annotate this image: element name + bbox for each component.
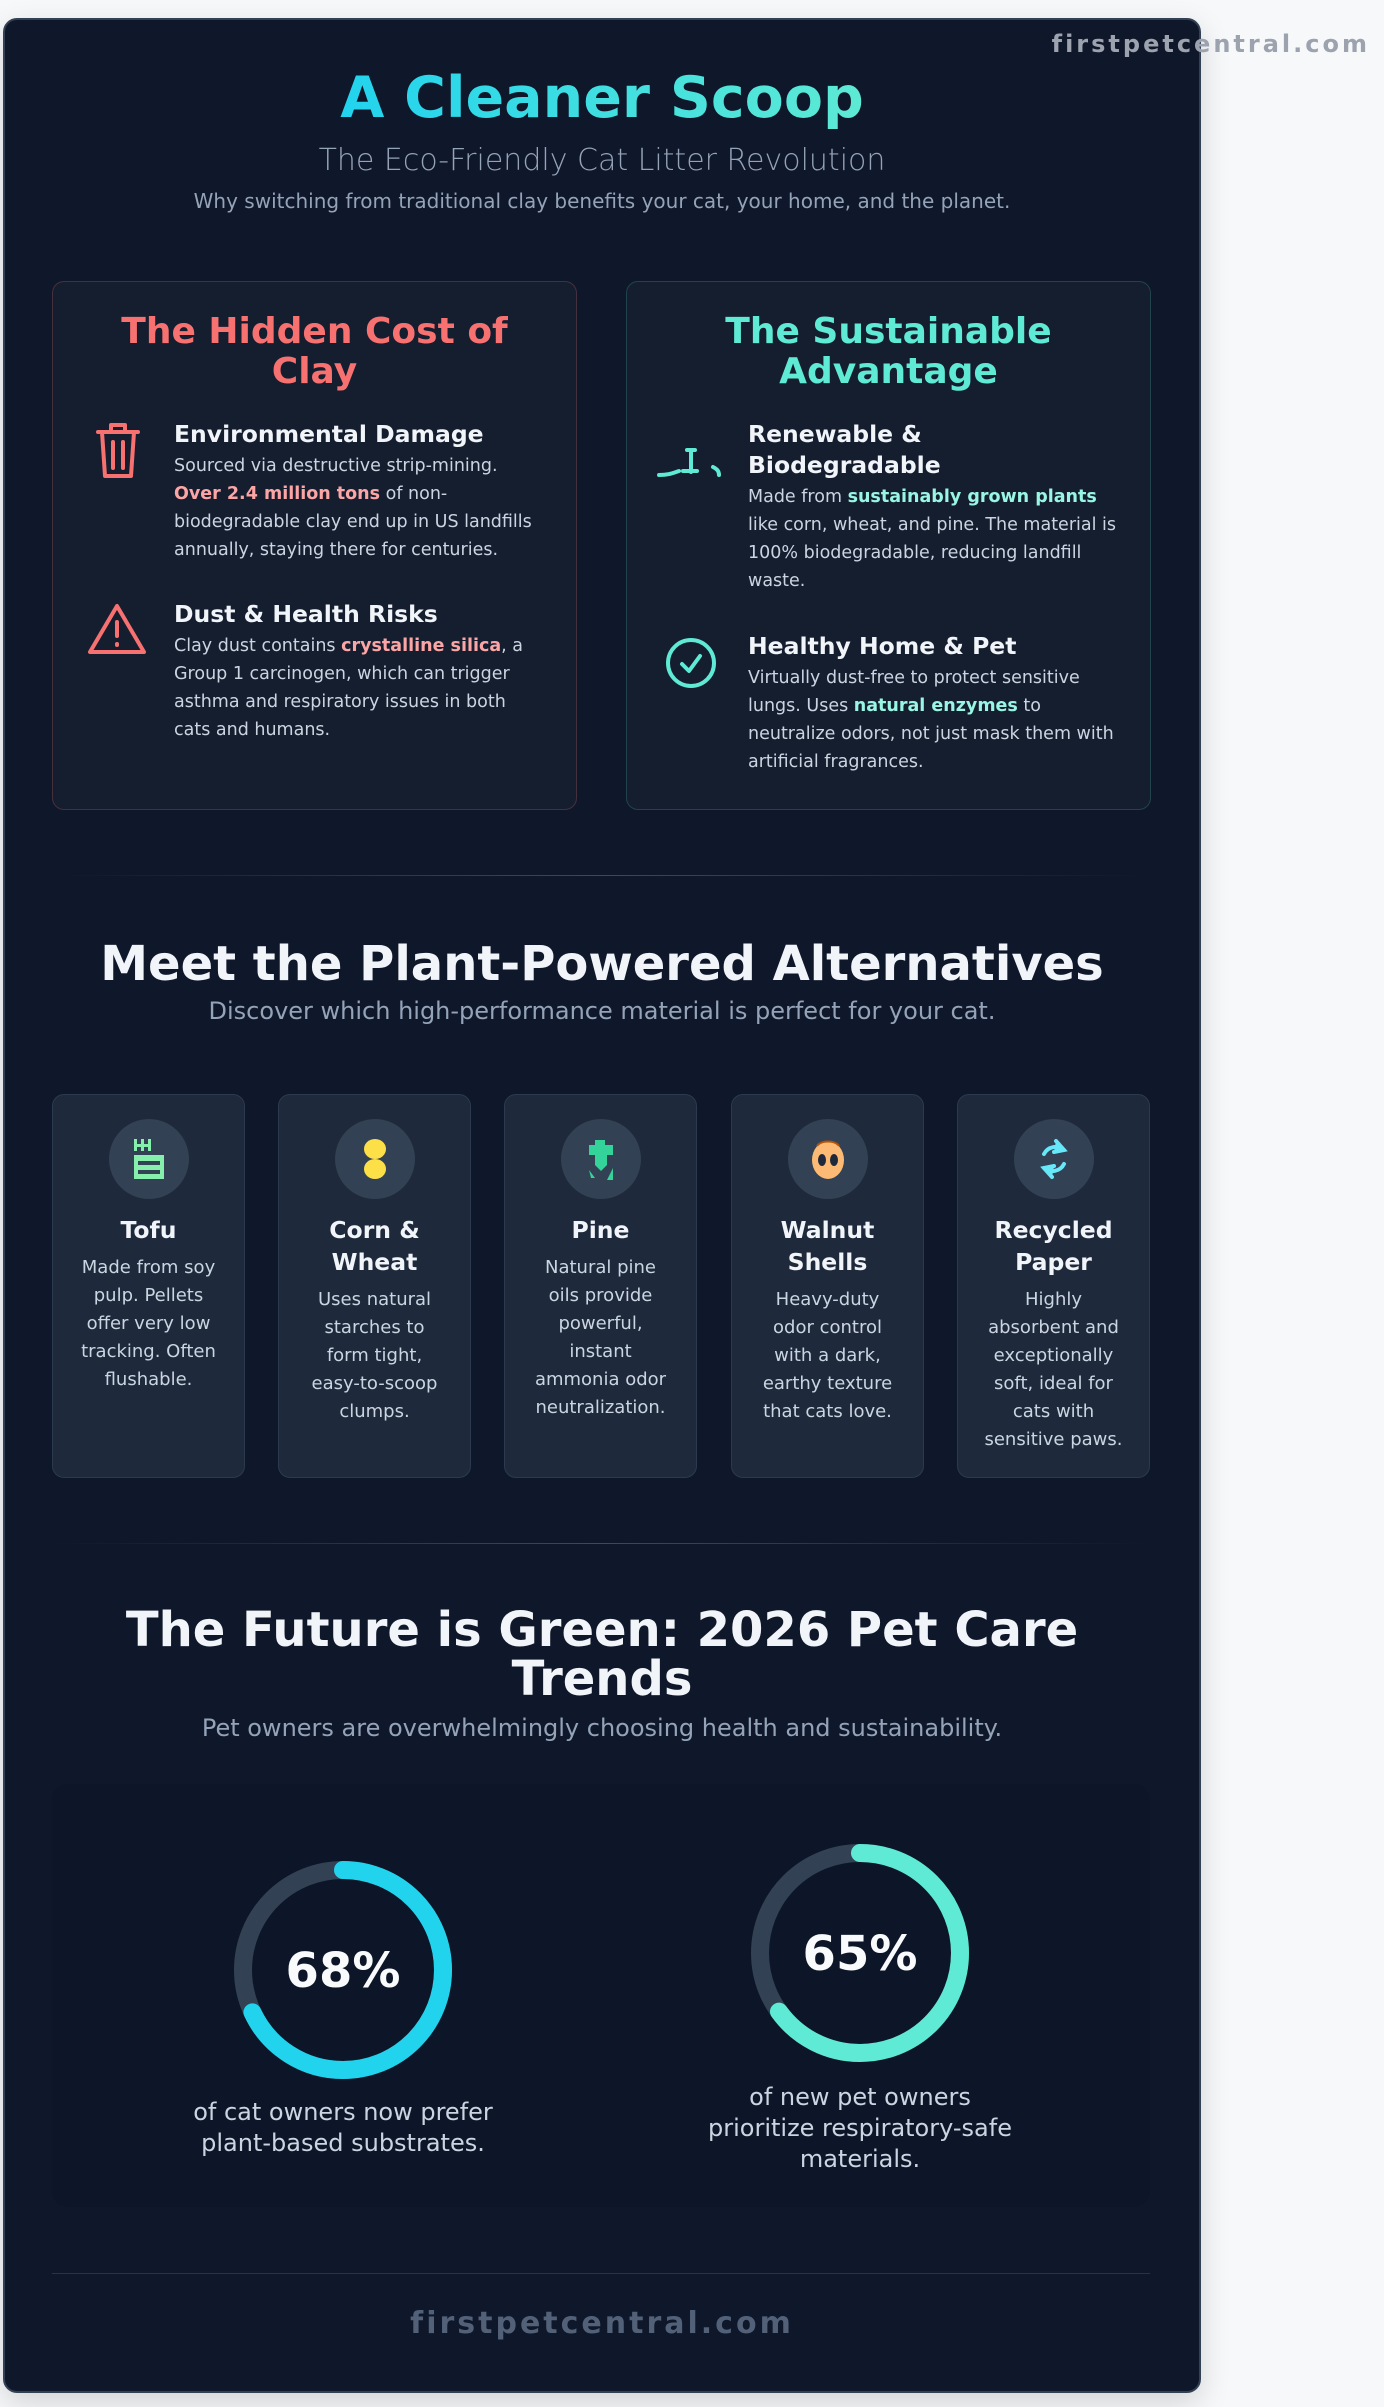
item: dust & health: Dust & Health Risks	[174, 600, 438, 628]
donut chart: 68%	[234, 1861, 452, 2079]
donut chart: 68%: 68%	[286, 1943, 400, 1999]
icon: check circle	[666, 638, 716, 688]
card: pine: Natural pine oils provide powerful, instant ammonia odor neutralization.	[535, 1257, 666, 1418]
card: corn & wheat	[278, 1094, 471, 1478]
title: A Cleaner Scoop	[340, 65, 864, 131]
donut chart: 65%: 65%	[803, 1926, 917, 1982]
heading: hidden cost: Clay	[272, 351, 357, 392]
heading: trends: The Future is Green: 2026 Pet Care	[126, 1602, 1078, 1658]
card: corn & wheat: Wheat	[332, 1248, 417, 1276]
card: corn & wheat: Uses natural starches to form tight, easy-to-scoop clumps.	[312, 1289, 437, 1422]
icon: renewable	[657, 448, 721, 477]
footer: firstpetcentral.com	[410, 2306, 794, 2341]
icon: warning	[88, 604, 146, 654]
card: walnut: Shells	[788, 1248, 867, 1276]
heading: trends: Trends	[512, 1651, 692, 1707]
panel: sustainable advantage	[626, 281, 1151, 810]
heading: sustainable: The Sustainable	[725, 311, 1052, 352]
icon: pine	[560, 1119, 640, 1199]
item: healthy home: Virtually dust-free to protect sensitive lungs. Uses natural enzymes to neutralize odors, not just mask them with artificial fragrances.	[748, 668, 1114, 772]
heading: sustainable	[725, 311, 1052, 392]
item: dust & health: Clay dust contains crystalline silica, a Group 1 carcinogen, which can trigger asthma and respiratory issues in both cats and humans.	[174, 636, 523, 740]
subheading: trends: Pet owners are overwhelmingly choosing health and sustainability.	[202, 1714, 1002, 1742]
item: healthy home: Healthy Home & Pet	[748, 632, 1016, 660]
item: environmental damage: Environmental Damage	[174, 420, 484, 448]
heading: trends	[126, 1602, 1078, 1707]
icon: trash	[96, 423, 140, 478]
subheading: alternatives: Discover which high-performance material is perfect for your cat.	[209, 997, 995, 1025]
card: tofu: Made from soy pulp. Pellets offer very low tracking. Often flushable.	[81, 1257, 216, 1390]
label: 68%: of cat owners now prefer plant-based substrates.	[193, 2098, 493, 2157]
card: recycled paper: Paper	[1015, 1248, 1092, 1276]
card: recycled paper: Recycled	[994, 1216, 1113, 1244]
stats panel	[52, 1784, 1150, 2207]
donut chart: 65%	[751, 1844, 969, 2062]
card: walnut: Heavy-duty odor control with a dark, earthy texture that cats love.	[763, 1289, 892, 1422]
card: pine	[504, 1094, 697, 1478]
heading: alternatives: Meet the Plant-Powered Alternatives	[100, 936, 1104, 992]
watermark top: firstpetcentral.com	[1052, 30, 1370, 58]
item: environmental damage: Sourced via destructive strip-mining. Over 2.4 million tons of non-biodegradable clay end up in US landfills annually, staying there for centuries.	[174, 456, 532, 560]
icon: walnut	[788, 1119, 868, 1199]
card: recycled paper: Highly absorbent and exceptionally soft, ideal for cats with sensitive paws.	[984, 1289, 1123, 1450]
card: walnut: Walnut	[781, 1216, 874, 1244]
item: renewable: Renewable &	[748, 420, 922, 448]
card: tofu: Tofu	[120, 1216, 176, 1244]
icon: corn	[334, 1119, 414, 1199]
card: tofu	[52, 1094, 245, 1478]
card: pine: Pine	[572, 1216, 629, 1244]
item: renewable	[748, 420, 1116, 591]
heading: hidden cost: The Hidden Cost of	[121, 311, 508, 352]
tagline: Why switching from traditional clay benefits your cat, your home, and the planet.	[194, 189, 1010, 213]
heading: sustainable: Advantage	[779, 351, 998, 392]
item: renewable: Biodegradable	[748, 451, 941, 479]
panel: hidden cost of clay	[52, 281, 577, 810]
card: corn & wheat: Corn &	[329, 1216, 420, 1244]
label: 65%: of new pet owners prioritize respiratory-safe materials.	[708, 2083, 1012, 2173]
item: renewable: Made from sustainably grown plants like corn, wheat, and pine. The material is 100% biodegradable, reducing landfill waste.	[748, 487, 1116, 591]
card: recycled paper	[957, 1094, 1150, 1478]
card: walnut	[731, 1094, 924, 1478]
subtitle: The Eco-Friendly Cat Litter Revolution	[319, 143, 885, 178]
heading: hidden cost	[121, 311, 508, 392]
icon: tofu	[108, 1119, 188, 1199]
icon: recycle	[1014, 1119, 1094, 1199]
